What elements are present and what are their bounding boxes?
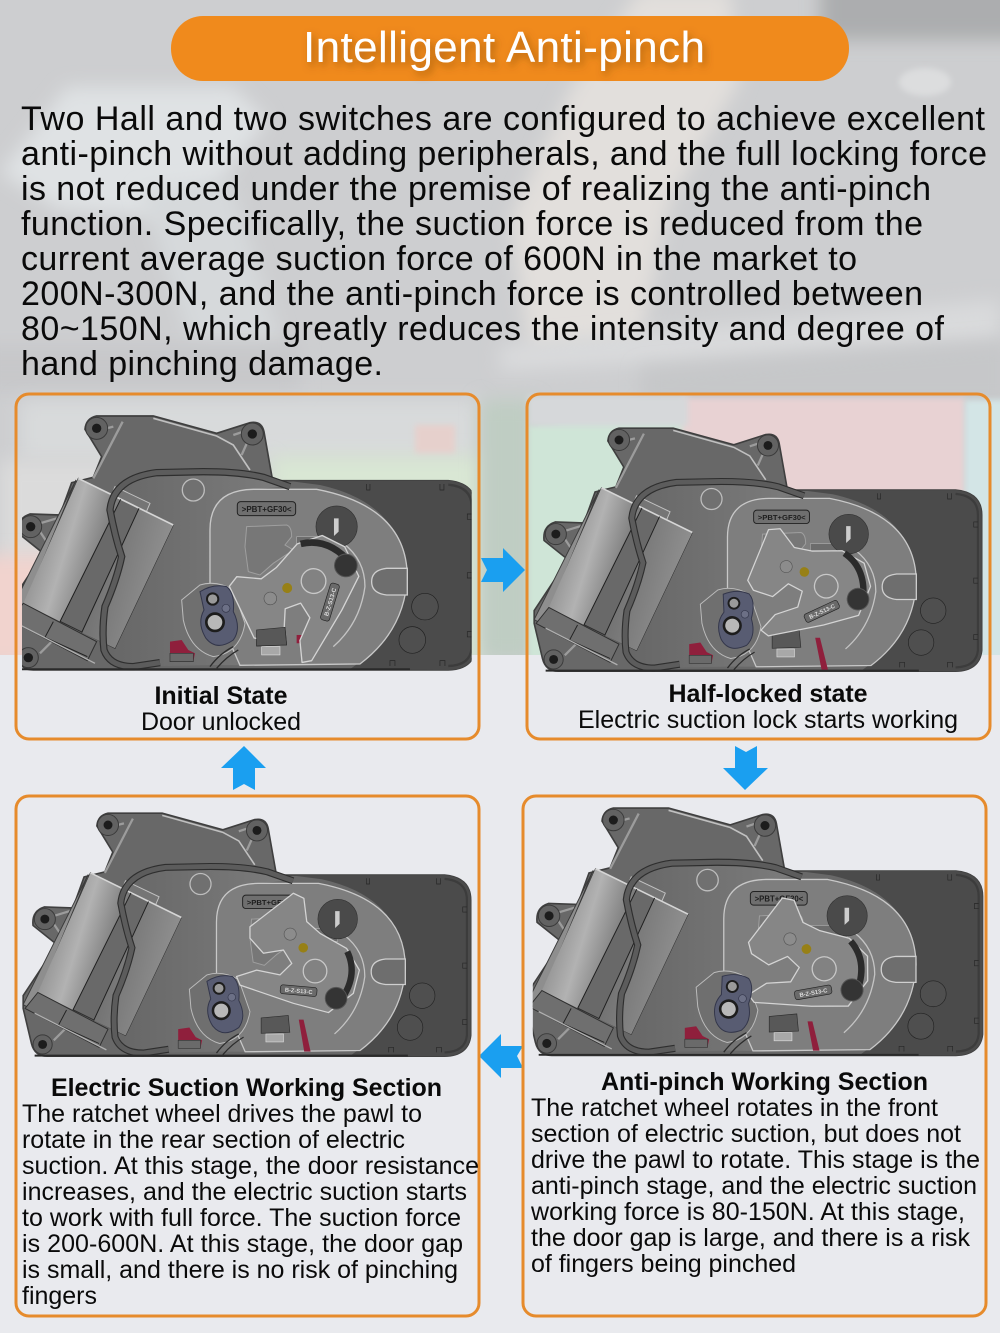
text: anti-pinch section	[530, 1068, 980, 1278]
intro paragraph: anti-pinch without adding peripherals, and the full locking force	[21, 135, 987, 173]
diagram: lock in anti-pinch section	[527, 808, 983, 1055]
intro paragraph: function. Specifically, the suction force is reduced from the	[21, 205, 923, 243]
caption: half-locked state: Half-locked state	[668, 680, 868, 708]
text: anti-pinch section: section of electric suction, but does not	[531, 1120, 961, 1148]
text: electric suction section: The ratchet wheel drives the pawl to	[22, 1100, 422, 1128]
caption: half-locked state: Electric suction lock starts working	[578, 706, 958, 734]
text: electric suction section: increases, and the electric suction starts	[22, 1178, 467, 1206]
arrow: right to half-locked	[481, 548, 525, 592]
caption: initial state	[141, 682, 301, 736]
intro paragraph: current average suction force of 600N in the market to	[21, 240, 857, 278]
intro paragraph: 200N-300N, and the anti-pinch force is controlled between	[21, 275, 923, 313]
arrow: left to electric suction	[479, 1034, 523, 1078]
text: anti-pinch section: drive the pawl to rotate. This stage is the	[531, 1146, 980, 1174]
text: anti-pinch section: Anti-pinch Working Section	[601, 1068, 928, 1096]
diagram: lock in electric suction section: >PBT+GF30<	[247, 898, 295, 907]
panel: electric suction working section	[16, 796, 479, 1316]
text: electric suction section: fingers	[22, 1282, 97, 1310]
arrow: up to initial state	[221, 746, 266, 790]
diagram: lock in initial state: >PBT+GF30<	[242, 505, 292, 514]
diagram: lock in electric suction section	[23, 813, 471, 1056]
diagram: lock half-locked: >PBT+GF30<	[758, 513, 806, 522]
title banner: Intelligent Anti-pinch	[303, 23, 705, 72]
text: anti-pinch section: working force is 80-150N. At this stage,	[530, 1198, 965, 1226]
caption: initial state: Initial State	[154, 682, 288, 710]
intro paragraph: is not reduced under the premise of realizing the anti-pinch	[21, 170, 931, 208]
text: electric suction section: suction. At this stage, the door resistance	[22, 1152, 479, 1180]
caption: initial state: Door unlocked	[141, 708, 301, 736]
background photo (blurred)	[0, 0, 1000, 655]
diagram: lock in initial state: B-Z-S13-C	[324, 587, 339, 617]
intro paragraph: 80~150N, which greatly reduces the intensity and degree of	[21, 310, 945, 348]
title banner	[171, 16, 849, 81]
text: electric suction section: Electric Suction Working Section	[51, 1074, 442, 1102]
panel: anti-pinch working section	[523, 796, 986, 1316]
diagram: lock in initial state	[8, 416, 476, 670]
diagram: lock half-locked: B-Z-S13-C	[809, 604, 836, 621]
text: electric suction section	[22, 1074, 479, 1310]
intro paragraph: hand pinching damage.	[21, 345, 383, 383]
intro paragraph	[21, 100, 987, 383]
text: electric suction section: is small, and there is no risk of pinching	[22, 1256, 458, 1284]
diagram: lock in anti-pinch section: >PBT+GF30<	[755, 895, 804, 904]
text: anti-pinch section: anti-pinch stage, and the electric suction	[531, 1172, 977, 1200]
text: anti-pinch section: of fingers being pinched	[531, 1250, 796, 1278]
intro paragraph: Two Hall and two switches are configured to achieve excellent	[21, 100, 986, 138]
diagram: lock in electric suction section: B-Z-S13-C	[285, 988, 313, 996]
text: electric suction section: to work with full force. The suction force	[22, 1204, 461, 1232]
diagram: lock in anti-pinch section: B-Z-S13-C	[799, 988, 829, 999]
text: anti-pinch section: The ratchet wheel rotates in the front	[531, 1094, 938, 1122]
panel: initial state	[8, 394, 479, 739]
caption: half-locked state	[578, 680, 958, 734]
text: electric suction section: is 200-600N. At this stage, the door gap	[22, 1230, 463, 1258]
text: electric suction section: rotate in the rear section of electric	[22, 1126, 405, 1154]
diagram: lock half-locked	[534, 428, 982, 671]
panel: half-locked state	[527, 394, 990, 739]
text: anti-pinch section: the door gap is large, and there is a risk	[531, 1224, 970, 1252]
arrow: down to anti-pinch	[723, 746, 768, 790]
